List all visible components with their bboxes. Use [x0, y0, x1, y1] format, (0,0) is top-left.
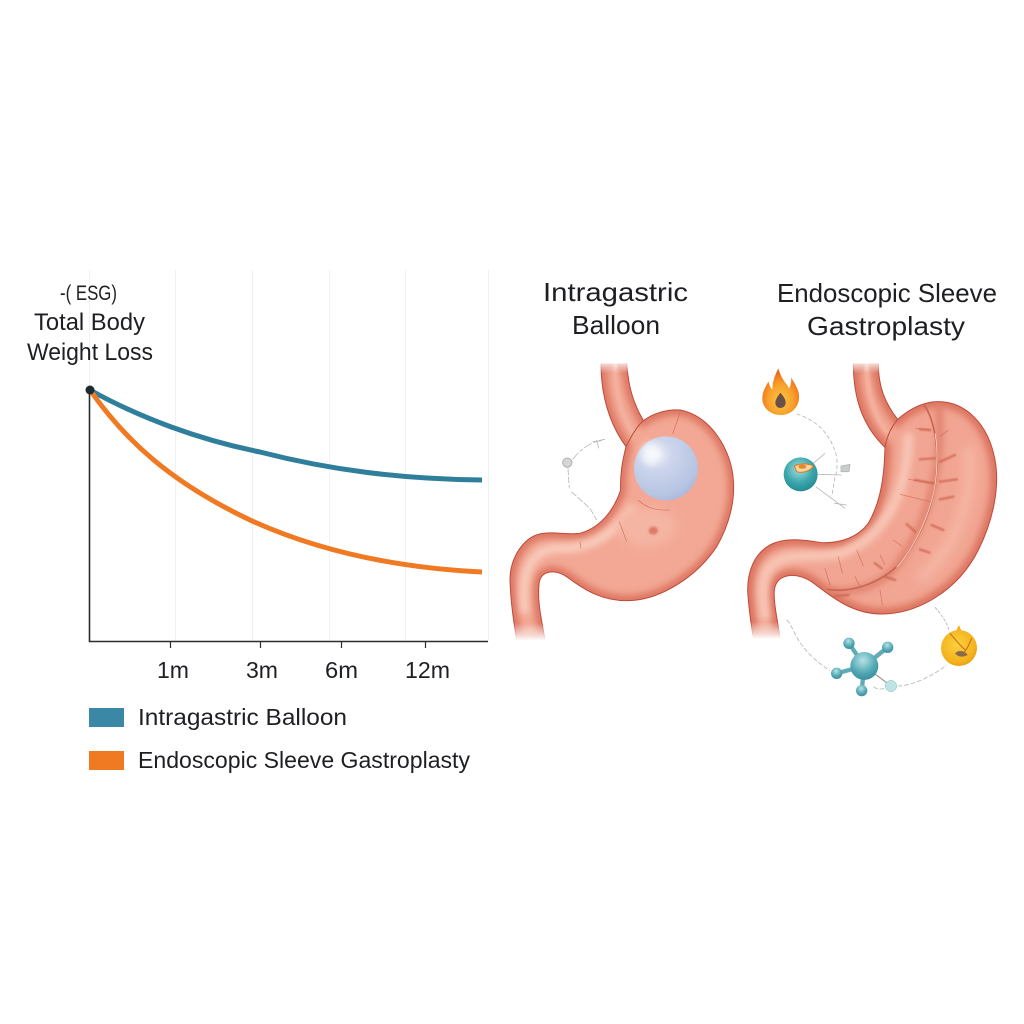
heading: endoscopic sleeve gastroplasty: Gastroplasty	[807, 311, 965, 341]
legend	[89, 704, 470, 773]
infographic canvas	[27, 270, 998, 773]
icon: molecule	[831, 638, 897, 696]
y-axis title	[27, 282, 153, 366]
annotation: sketched connectors	[797, 414, 850, 508]
x-axis labels: 1m	[157, 657, 189, 683]
balloon	[634, 436, 698, 500]
legend: Endoscopic Sleeve Gastroplasty	[138, 747, 470, 773]
x-axis ticks	[170, 641, 426, 648]
legend: Intragastric Balloon	[138, 704, 347, 730]
illustration: stomach with sleeve sutures	[745, 360, 1015, 696]
suture pleats	[825, 428, 957, 605]
stomach outline	[748, 363, 997, 638]
icon: teal sphere	[784, 457, 818, 491]
x-axis labels: 12m	[405, 657, 450, 683]
chart origin point	[86, 386, 94, 394]
line: intragastric balloon	[90, 390, 482, 480]
x-axis labels: 3m	[246, 657, 278, 683]
x-axis labels	[157, 657, 450, 683]
heading: intragastric balloon: Intragastric	[543, 277, 688, 307]
suture line	[827, 404, 937, 590]
illustration: stomach with balloon	[510, 363, 734, 640]
stomach outline	[510, 363, 734, 640]
panel: weight loss chart	[27, 270, 488, 773]
icon: gold sphere	[941, 625, 977, 666]
x-axis labels: 6m	[325, 657, 358, 683]
icon: flame	[762, 368, 799, 415]
annotation: sketched device	[563, 439, 605, 520]
annotation: dashed arcs	[787, 607, 949, 689]
heading: endoscopic sleeve gastroplasty: Endoscopic Sleeve	[777, 278, 997, 308]
chart axes	[90, 390, 488, 642]
fade: tube ends	[850, 360, 882, 373]
fade: tube ends	[598, 360, 630, 373]
y-axis title: Total Body	[34, 309, 145, 336]
y-axis title: -( ESG)	[60, 282, 117, 305]
y-axis title: Weight Loss	[27, 339, 153, 366]
heading: endoscopic sleeve gastroplasty	[777, 278, 997, 341]
heading: intragastric balloon	[543, 277, 688, 340]
heading: intragastric balloon: Balloon	[572, 310, 660, 340]
line: endoscopic sleeve gastroplasty	[90, 390, 482, 572]
